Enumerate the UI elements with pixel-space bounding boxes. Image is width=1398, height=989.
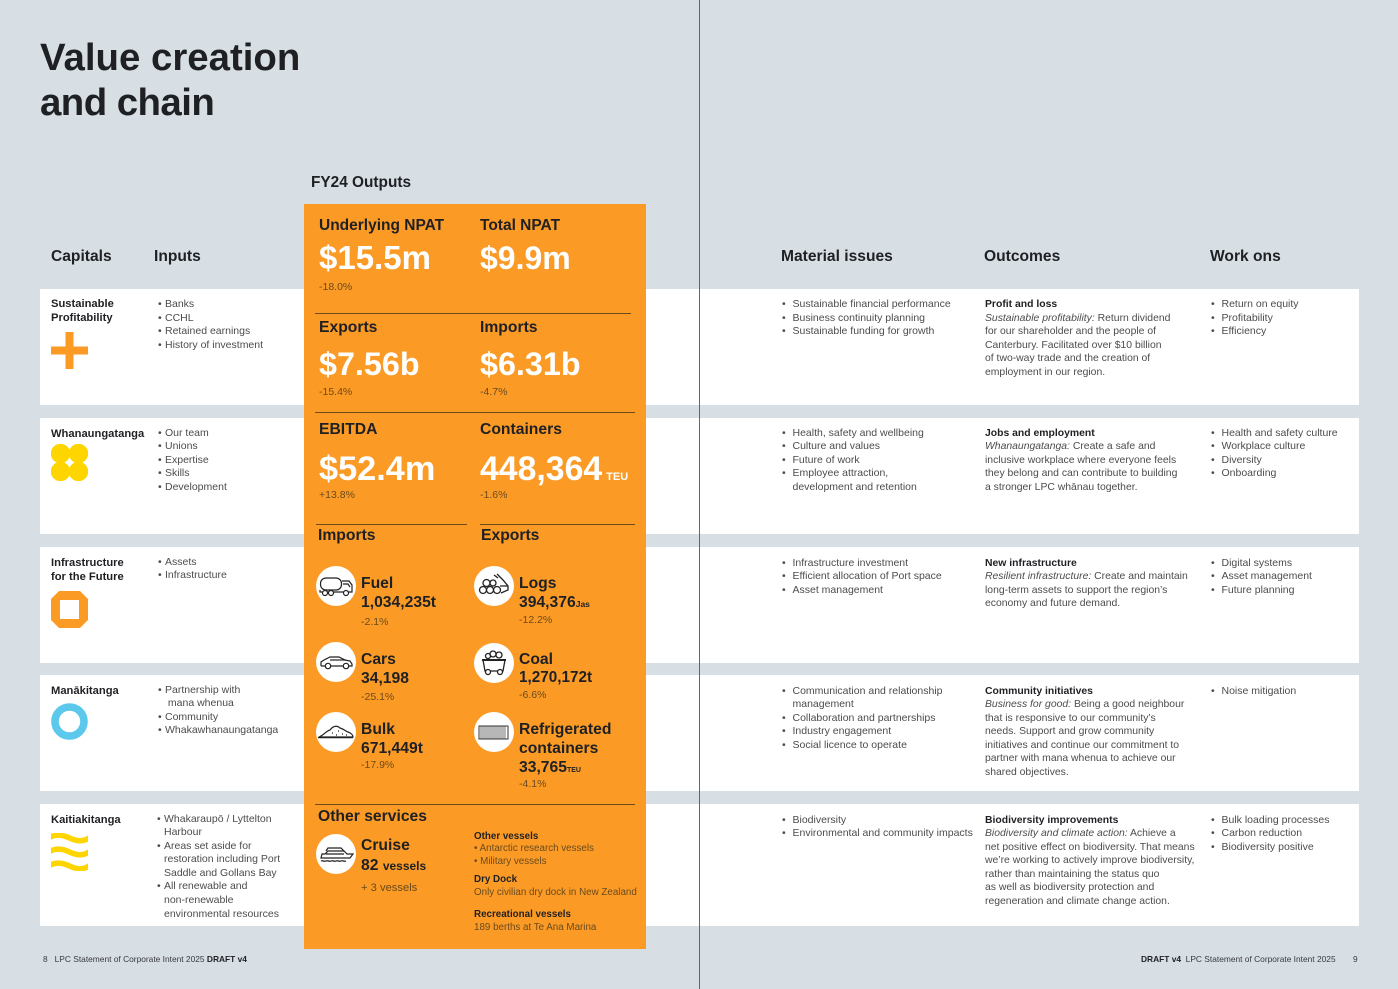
text: 9 [1353,954,1358,964]
footer: right page: DRAFT v4 LPC Statement of Corporate Intent 2025 [1141,954,1336,964]
work ons: environment: • [1211,827,1215,839]
material issues: people: Health, safety and wellbeing [792,427,924,439]
work ons: profit: Profitability [1222,312,1273,324]
item: logs: Logs [519,574,556,592]
capital: infrastructure for the future: for the Future [51,571,124,583]
material issues: infrastructure [782,557,942,596]
capital: infrastructure for the future: Infrastructure [51,557,124,569]
inputs: kaitiakitanga: Saddle and Gollans Bay [164,867,277,879]
work ons: people: Onboarding [1222,467,1276,479]
material issues: community: • [782,712,786,724]
outcome: biodiversity improvements: as well as biodiversity protection and [985,882,1154,893]
outcome: biodiversity improvements: Biodiversity and climate action: Achieve a [985,828,1176,839]
outcome: new infrastructure [985,558,1188,609]
outcome: new infrastructure: economy and future demand. [985,598,1120,609]
material issues: people: Future of work [792,454,860,466]
inputs: whanaungatanga: Expertise [165,454,209,466]
work ons: profit: Return on equity [1222,298,1299,310]
work ons: people: • [1211,427,1215,439]
inputs: kaitiakitanga: • [157,813,161,825]
material issues: community [782,685,942,751]
item: fuel: -2.1% [361,616,388,628]
work ons: people: Health and safety culture [1222,427,1338,439]
work ons: infrastructure: • [1211,557,1215,569]
text: dry dock [474,874,637,898]
icon: yellow four circles [51,444,88,481]
material issues: profit: Sustainable funding for growth [792,325,934,337]
inputs: kaitiakitanga: Areas set aside for [164,840,252,852]
item: logs: 394,376Jas [519,594,590,610]
text: recreational vessels: 189 berths at Te Ana Marina [474,922,596,933]
outcome: profit and loss: for our shareholder and the people of [985,326,1156,337]
panel: kaitiakitanga row [40,804,1359,926]
work ons: environment: • [1211,814,1215,826]
work ons: people: • [1211,467,1215,479]
item: refrigerated containers: -4.1% [519,778,546,790]
outcome: profit and loss: Sustainable profitability: Return dividend [985,313,1170,324]
heading: other services: Other services [318,808,427,825]
inputs: kaitiakitanga [157,813,280,920]
outcome: biodiversity improvements: we’re working to actively improve biodiversity, [985,855,1194,866]
material issues: people: • [782,440,786,452]
outcome: community initiatives: partner with mana whenua to achieve our [985,753,1176,764]
metric: exports value [319,319,420,398]
work ons: environment [1211,814,1329,854]
outcome: biodiversity improvements: regeneration and climate change action. [985,896,1170,907]
inputs: kaitiakitanga: non-renewable [164,894,233,906]
heading: exports: Exports [481,527,539,544]
item: logs: -12.2% [519,614,552,626]
text: other vessels: Other vessels [474,831,538,842]
metric: total NPAT: Total NPAT [480,217,560,234]
work ons: people: • [1211,440,1215,452]
work ons: infrastructure [1211,557,1312,597]
capital: whanaungatanga: Whanaungatanga [51,428,144,440]
capital: manakitanga: Manākitanga [51,685,119,697]
inputs: sustainable profitability: • [158,298,162,310]
material issues: people: Employee attraction, [792,467,888,479]
item: cruise: 82 vessels [361,856,426,874]
title: and chain [40,80,214,124]
inputs: manakitanga: mana whenua [168,697,234,709]
inputs: whanaungatanga: • [158,454,162,466]
work ons: people: Workplace culture [1222,440,1305,452]
outcome: jobs and employment: inclusive workplace where everyone feels [985,455,1176,466]
outcome: biodiversity improvements: Biodiversity improvements [985,815,1118,826]
inputs: sustainable profitability: History of investment [165,339,263,351]
item: refrigerated containers [474,712,611,790]
icon: orange plus [51,332,88,369]
material issues: profit: • [782,325,786,337]
item: cars: -25.1% [361,691,394,703]
outcome: new infrastructure: long-term assets to support the region’s [985,585,1167,596]
centre page divider [699,0,700,989]
inputs: infrastructure: • [158,569,162,581]
item: fuel: 1,034,235t [361,594,436,611]
inputs: whanaungatanga: • [158,427,162,439]
work ons: profit: • [1211,298,1215,310]
metric: imports value: -4.7% [480,386,507,398]
work ons: infrastructure: • [1211,570,1215,582]
work ons: people: • [1211,454,1215,466]
item: bulk: Bulk [361,720,395,738]
work ons: infrastructure: Digital systems [1222,557,1292,569]
work ons: profit: • [1211,325,1215,337]
inputs: kaitiakitanga: environmental resources [164,908,279,920]
material issues: community: Collaboration and partnerships [792,712,936,724]
icon: logs [474,566,514,606]
list: other vessels [474,831,637,933]
outcome: biodiversity improvements: net positive effect on biodiversity. That means [985,842,1195,853]
inputs: kaitiakitanga: Whakaraupō / Lyttelton [164,813,272,825]
outcome: profit and loss: Canterbury. Facilitated over $10 billion [985,340,1162,351]
inputs: whanaungatanga: • [158,467,162,479]
material issues: infrastructure: Efficient allocation of Port space [792,570,942,582]
outcome: biodiversity improvements: rather than maintaining the status quo [985,869,1159,880]
item: cruise: Cruise [361,836,410,854]
material issues: infrastructure: Asset management [792,584,883,596]
capital: infrastructure for the future [51,557,124,583]
inputs: kaitiakitanga: • [157,840,161,852]
work ons: infrastructure: • [1211,584,1215,596]
metric: EBITDA: +13.8% [319,489,355,501]
column heading: work ons: Work ons [1210,248,1281,265]
item: bulk: 671,449t [361,740,423,756]
column heading: inputs: Inputs [154,248,201,265]
item: coal: 1,270,172t [519,668,592,686]
material issues: people: • [782,467,786,479]
item: coal: -6.6% [519,689,546,701]
work ons: infrastructure: Future planning [1222,584,1294,596]
item: coal [474,643,592,701]
material issues: environment: • [782,814,786,826]
material issues: people [782,427,924,493]
material issues: environment: • [782,827,786,839]
material issues: community: • [782,725,786,737]
work ons: people [1211,427,1338,481]
material issues: profit [782,298,951,337]
material issues: people: development and retention [792,481,917,493]
work ons: profit: Efficiency [1222,325,1266,337]
heading: imports: Imports [318,527,376,544]
work ons: profit: • [1211,312,1215,324]
outcome: community initiatives: shared objectives. [985,767,1069,778]
inputs: whanaungatanga: Development [165,481,227,493]
metric: containers: 448,364 TEU [480,450,628,488]
column heading: material issues: Material issues [781,248,893,265]
outcome: community initiatives: that is responsive to our community’s [985,713,1156,724]
outcome: jobs and employment: Whanaungatanga: Create a safe and [985,441,1155,452]
item: refrigerated containers: containers [519,740,598,756]
inputs: sustainable profitability: • [158,339,162,351]
inputs: sustainable profitability: • [158,325,162,337]
item: cars: Cars [361,650,396,668]
material issues: profit: Sustainable financial performance [792,298,951,310]
metric: containers: -1.6% [480,489,507,501]
text: recreational vessels: Recreational vessels [474,909,571,920]
outcome: jobs and employment: they belong and can contribute to building [985,468,1177,479]
material issues: community: Social licence to operate [792,739,907,751]
panel: manakitanga row [40,675,1359,791]
item: fuel: Fuel [361,575,393,592]
text: recreational vessels [474,909,596,933]
material issues: community: management [792,698,854,710]
material issues: community: Communication and relationship [792,685,942,697]
inputs: whanaungatanga [158,427,227,493]
inputs: whanaungatanga: • [158,440,162,452]
material issues: environment: Biodiversity [792,814,846,826]
metric: containers [480,421,628,501]
metric: underlying NPAT: $15.5m [319,239,431,276]
material issues: people: • [782,427,786,439]
capital: sustainable profitability: Profitability [51,312,113,324]
outcome: profit and loss: Profit and loss [985,299,1057,310]
material issues: profit: • [782,312,786,324]
work ons: community: • [1211,685,1215,697]
metric: containers: Containers [480,421,562,438]
item: cars: 34,198 [361,670,409,686]
metric: total NPAT: $9.9m [480,240,571,276]
inputs: manakitanga [158,684,278,736]
inputs: manakitanga: • [158,724,162,736]
inputs: kaitiakitanga: restoration including Port [164,853,280,865]
icon: fuel truck [316,566,356,606]
inputs: sustainable profitability: Banks [165,298,194,310]
item: bulk [316,712,423,771]
icon: bulk pile [316,712,356,752]
item: refrigerated containers: Refrigerated [519,720,611,738]
item: cars [316,642,409,703]
metric: EBITDA: EBITDA [319,421,377,438]
metric: underlying NPAT: Underlying NPAT [319,217,444,234]
outcome: community initiatives [985,686,1184,778]
metric: imports value: Imports [480,319,538,336]
inputs: sustainable profitability: Retained earnings [165,325,250,337]
item: coal: Coal [519,650,553,668]
outcome: jobs and employment: Jobs and employment [985,428,1095,439]
material issues: community: • [782,739,786,751]
icon: cruise ship [316,834,356,874]
icon: yellow waves [51,833,88,871]
inputs: whanaungatanga: • [158,481,162,493]
material issues: people: • [782,454,786,466]
inputs: infrastructure: • [158,556,162,568]
metric: EBITDA [319,421,435,501]
capital: sustainable profitability: Sustainable [51,298,114,310]
text: other vessels: • Antarctic research vessels [474,843,594,854]
work ons: people: Diversity [1222,454,1262,466]
inputs: sustainable profitability: CCHL [165,312,194,324]
inputs: infrastructure: Infrastructure [165,569,227,581]
metric: EBITDA: $52.4m [319,450,435,488]
material issues: infrastructure: • [782,570,786,582]
capital: kaitiakitanga: Kaitiakitanga [51,814,121,826]
item: cruise [316,834,426,894]
item: logs [474,566,590,626]
metric: imports value: $6.31b [480,346,581,382]
work ons: environment: Bulk loading processes [1222,814,1329,826]
outcome: community initiatives: Community initiatives [985,686,1093,697]
icon: orange octagon [51,591,88,628]
text: dry dock: Dry Dock [474,874,517,885]
inputs: whanaungatanga: Unions [165,440,198,452]
icon: car [316,642,356,682]
footer: left page: 8 LPC Statement of Corporate Intent 2025 DRAFT v4 [43,954,247,964]
item: fuel [316,566,436,628]
text: other vessels [474,831,594,867]
item: refrigerated containers: 33,765TEU [519,758,581,776]
inputs: manakitanga: • [158,711,162,723]
metric: exports value: -15.4% [319,386,352,398]
outcome: new infrastructure: Resilient infrastructure: Create and maintain [985,571,1188,582]
outcome: community initiatives: initiatives and continue our commitment to [985,740,1179,751]
panel: sustainable profitability row [40,289,1359,405]
material issues: environment: Environmental and community impacts [792,827,973,839]
outcome: profit and loss: of two-way trade and the creation of [985,353,1150,364]
icon: shipping container [474,712,514,752]
inputs: kaitiakitanga: All renewable and [164,880,247,892]
capital: sustainable profitability [51,298,114,324]
outcome: community initiatives: needs. Support and grow community [985,726,1154,737]
panel: whanaungatanga row [40,418,1359,534]
work ons: environment: Carbon reduction [1222,827,1302,839]
work ons: community: Noise mitigation [1222,685,1296,697]
text: dry dock: Only civilian dry dock in New Zealand [474,887,637,898]
inputs: sustainable profitability: • [158,312,162,324]
work ons: profit [1211,298,1299,339]
title [40,36,300,124]
work ons: environment: • [1211,841,1215,853]
outcome: biodiversity improvements [985,815,1195,907]
inputs: kaitiakitanga: • [157,880,161,892]
material issues: people: Culture and values [792,440,880,452]
material issues: community: Industry engagement [792,725,891,737]
inputs: manakitanga: Partnership with [165,684,240,696]
inputs: sustainable profitability [158,298,263,351]
outcome: community initiatives: Business for good: Being a good neighbour [985,699,1184,710]
title: Value creation [40,36,300,79]
material issues: infrastructure: • [782,557,786,569]
panel: infrastructure row [40,547,1359,663]
column heading: outcomes: Outcomes [984,248,1060,265]
inputs: manakitanga: Whakawhanaungatanga [165,724,278,736]
outcome: profit and loss [985,299,1170,378]
item: bulk: -17.9% [361,759,394,771]
work ons: infrastructure: Asset management [1222,570,1312,582]
icon: coal cart [474,643,514,683]
metric: total NPAT [480,217,571,276]
work ons: environment: Biodiversity positive [1222,841,1314,853]
outcome: profit and loss: employment in our region. [985,367,1105,378]
inputs: infrastructure: Assets [165,556,197,568]
material issues: community: • [782,685,786,697]
panel: FY24 outputs [304,204,646,949]
item: cruise: + 3 vessels [361,882,417,894]
inputs: whanaungatanga: Skills [165,467,190,479]
metric: underlying NPAT [319,217,444,293]
text: other vessels: • Military vessels [474,856,547,867]
material issues: environment [782,814,973,839]
inputs: manakitanga: Community [165,711,218,723]
icon: blue ring [51,703,88,740]
material issues: profit: • [782,298,786,310]
outcome: jobs and employment [985,428,1177,493]
metric: imports value [480,319,581,398]
column heading: capitals: Capitals [51,248,112,265]
material issues: profit: Business continuity planning [792,312,925,324]
inputs: whanaungatanga: Our team [165,427,209,439]
heading: FY24 outputs: FY24 Outputs [311,174,411,191]
outcome: new infrastructure: New infrastructure [985,558,1077,569]
metric: exports value: $7.56b [319,346,420,382]
inputs: kaitiakitanga: Harbour [164,826,202,838]
outcome: jobs and employment: a stronger LPC whānau together. [985,482,1138,493]
metric: exports value: Exports [319,319,377,336]
inputs: manakitanga: • [158,684,162,696]
inputs: infrastructure [158,556,227,581]
material issues: infrastructure: Infrastructure investment [792,557,908,569]
metric: underlying NPAT: -18.0% [319,281,352,293]
material issues: infrastructure: • [782,584,786,596]
